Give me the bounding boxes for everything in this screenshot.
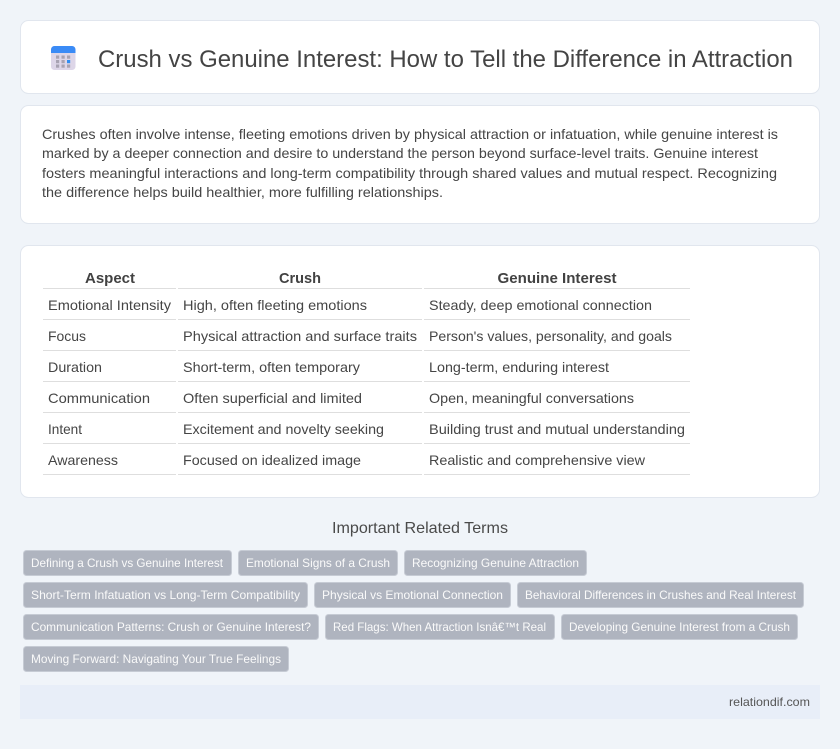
- chip: [24, 550, 232, 576]
- row: awareness: Focused on idealized image: [183, 452, 361, 468]
- row: emotional intensity: Emotional Intensity: [48, 297, 171, 313]
- table header: [85, 270, 617, 287]
- chip: Developing Genuine Interest from a Crush: [569, 620, 790, 634]
- row: duration: Duration: [48, 359, 102, 375]
- chip: [404, 550, 586, 576]
- chip: [24, 646, 288, 672]
- row: duration: Short-term, often temporary: [183, 359, 360, 375]
- panel: introduction: [20, 106, 820, 224]
- panel: header: [20, 20, 820, 94]
- chip: Red Flags: When Attraction Isnâ€™t Real: [333, 620, 546, 634]
- text block: introduction: the difference helps build healthier, more fulfilling relationships.: [42, 184, 443, 200]
- table header: Genuine Interest: [498, 270, 617, 287]
- row: awareness: Awareness: [48, 452, 118, 468]
- table header: Aspect: [85, 270, 135, 287]
- row: intent: Excitement and novelty seeking: [183, 421, 384, 437]
- row: focus: Physical attraction and surface traits: [183, 328, 417, 344]
- row: intent: Building trust and mutual understanding: [429, 421, 685, 437]
- chip: Short-Term Infatuation vs Long-Term Compatibility: [31, 588, 300, 602]
- text block: introduction: [42, 126, 778, 200]
- row: duration: [48, 359, 609, 375]
- text block: introduction: marked by a deeper connection and desire to understand the person beyond surface-level traits. Genuine interest: [42, 145, 758, 161]
- footer: [20, 685, 820, 719]
- row: communication: Communication: [48, 390, 150, 406]
- row: intent: [48, 421, 685, 437]
- chip: Recognizing Genuine Attraction: [412, 556, 579, 570]
- chip: [314, 582, 510, 608]
- chip: [24, 614, 318, 640]
- row: communication: [48, 390, 634, 406]
- chip: [238, 550, 398, 576]
- chip: [24, 582, 308, 608]
- chip: Emotional Signs of a Crush: [246, 556, 390, 570]
- chip: Moving Forward: Navigating Your True Feelings: [31, 652, 281, 666]
- text block: introduction: Crushes often involve intense, fleeting emotions driven by physical attraction or infatuation, while genuine interest is: [42, 126, 778, 142]
- row: emotional intensity: High, often fleeting emotions: [183, 297, 367, 313]
- icon: calendar: [51, 46, 76, 70]
- chip: [562, 614, 798, 640]
- chip: [518, 582, 804, 608]
- chip: Behavioral Differences in Crushes and Real Interest: [525, 588, 797, 602]
- row: communication: Open, meaningful conversations: [429, 390, 634, 406]
- row: focus: [48, 328, 672, 344]
- text block: introduction: fosters meaningful interactions and long-term compatibility through shared values and mutual respect. Recognizing: [42, 165, 777, 181]
- row: communication: Often superficial and limited: [183, 390, 362, 406]
- chip: Communication Patterns: Crush or Genuine Interest?: [31, 620, 311, 634]
- table header: Crush: [279, 270, 321, 287]
- row: focus: Person's values, personality, and goals: [429, 328, 672, 344]
- chip: [326, 614, 554, 640]
- row: duration: Long-term, enduring interest: [429, 359, 609, 375]
- title: Crush vs Genuine Interest: How to Tell the Difference in Attraction: [98, 46, 793, 73]
- chip: Physical vs Emotional Connection: [322, 588, 503, 602]
- footer source: relationdif.com: [729, 695, 810, 709]
- panel: comparison table: [20, 246, 820, 498]
- row: emotional intensity: Steady, deep emotional connection: [429, 297, 652, 313]
- row: emotional intensity: [48, 297, 652, 313]
- related term chips: [24, 550, 804, 672]
- row: awareness: [48, 452, 646, 468]
- row: focus: Focus: [48, 328, 86, 344]
- chip: Defining a Crush vs Genuine Interest: [31, 556, 224, 570]
- row: intent: Intent: [48, 421, 82, 437]
- heading: related terms: Important Related Terms: [332, 520, 508, 537]
- row: awareness: Realistic and comprehensive view: [429, 452, 646, 468]
